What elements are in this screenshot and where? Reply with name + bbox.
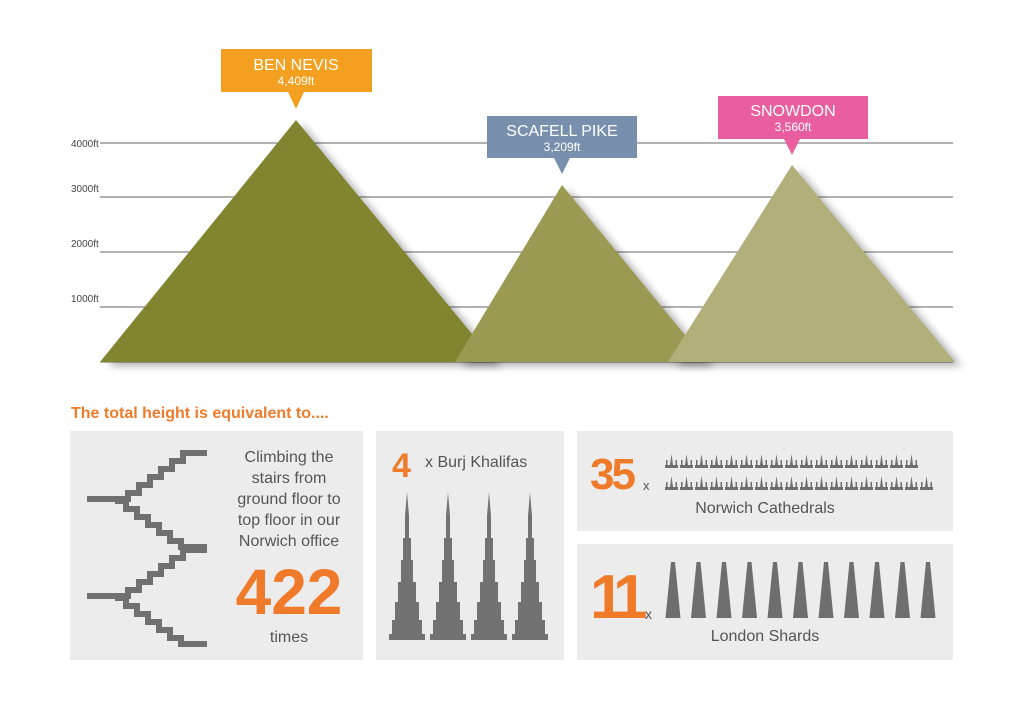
panel: London Shards: 11 — [590, 563, 646, 632]
text: stairs description: 422 — [236, 556, 342, 628]
panel: Norwich Cathedrals — [577, 431, 953, 531]
text: stairs description: stairs from — [252, 470, 326, 487]
panel: London Shards: x — [645, 606, 652, 622]
label: Snowdon: 3,560ft — [775, 120, 812, 134]
text: stairs description — [236, 449, 342, 646]
panel: stairs — [70, 431, 363, 660]
grid lines — [100, 143, 953, 362]
y-axis labels — [71, 139, 99, 305]
panel: Norwich Cathedrals: x — [643, 478, 650, 493]
label: Scafell Pike: 3,209ft — [544, 140, 581, 154]
section heading: The total height is equivalent to.... — [71, 405, 329, 422]
y-axis labels: 1000ft — [71, 294, 99, 305]
text: stairs description: Norwich office — [239, 533, 339, 550]
y-axis labels: 2000ft — [71, 239, 99, 250]
icon: shards — [666, 562, 936, 618]
panel: London Shards — [577, 544, 953, 660]
mountain: Ben Nevis — [100, 120, 502, 366]
mountain: Snowdon — [668, 165, 962, 366]
panel: Burj Khalifas: 4 — [392, 447, 411, 485]
icon: Burj Khalifa towers — [389, 492, 548, 640]
text: stairs description: top floor in our — [238, 512, 341, 529]
panel: Burj Khalifas: x Burj Khalifas — [425, 454, 527, 471]
panel: London Shards: London Shards — [711, 628, 819, 645]
label: Scafell Pike — [487, 116, 637, 174]
label: Snowdon: SNOWDON — [750, 103, 836, 120]
text: stairs description: times — [270, 629, 308, 646]
y-axis labels: 3000ft — [71, 184, 99, 195]
y-axis labels: 4000ft — [71, 139, 99, 150]
label: Snowdon — [718, 96, 868, 155]
panel: Burj Khalifas — [376, 431, 564, 660]
panel: Norwich Cathedrals: Norwich Cathedrals — [695, 500, 835, 517]
label: Scafell Pike: SCAFELL PIKE — [506, 123, 618, 140]
text: stairs description: Climbing the — [245, 449, 334, 466]
text: stairs description: ground floor to — [237, 491, 341, 508]
label: Ben Nevis — [221, 49, 372, 109]
label: Ben Nevis: 4,409ft — [278, 74, 315, 88]
icon: cathedrals — [665, 454, 933, 490]
label: Ben Nevis: BEN NEVIS — [253, 57, 339, 74]
mountain: Scafell Pike — [455, 185, 714, 366]
icon: stairs — [87, 453, 207, 644]
panel: Norwich Cathedrals: 35 — [590, 450, 635, 499]
